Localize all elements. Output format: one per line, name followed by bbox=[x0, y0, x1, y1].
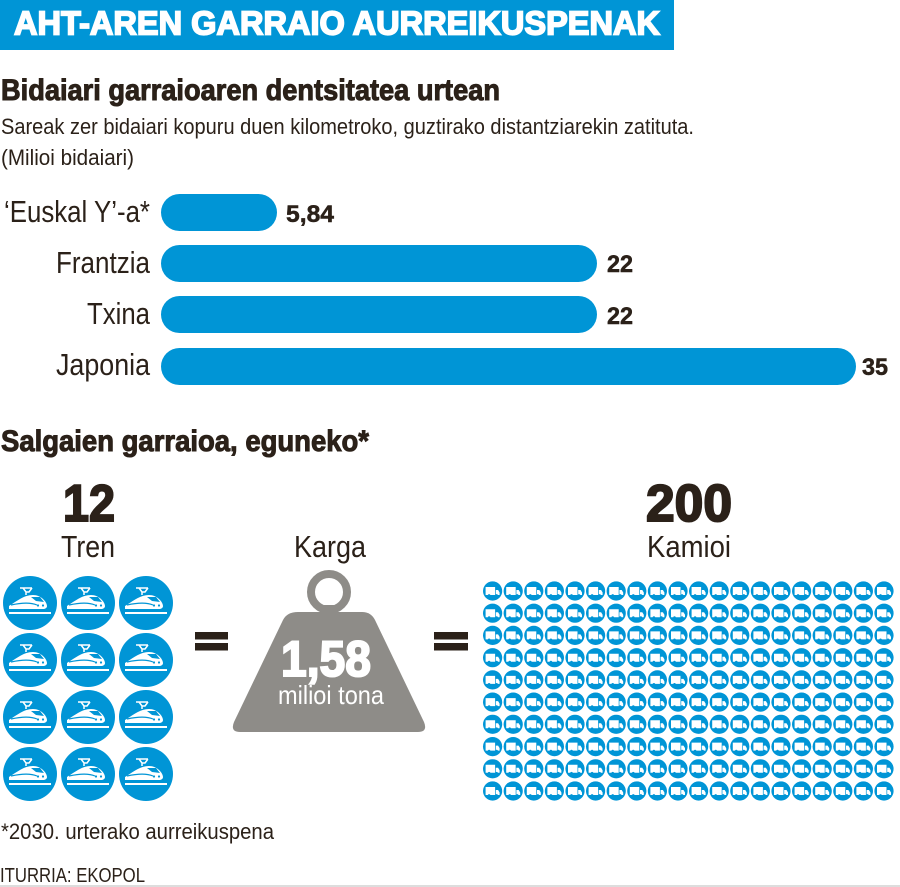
label: Karga: Karga bbox=[294, 529, 367, 564]
icons: 12 trains bbox=[3, 576, 173, 801]
equals sign right bbox=[434, 632, 468, 650]
bar: Japonia: Japonia bbox=[56, 347, 151, 382]
heading: passenger density: Bidaiari garraioaren dentsitatea urtean bbox=[1, 74, 500, 107]
number: 12 trains: Tren bbox=[61, 529, 115, 564]
number: 12 trains: 12 bbox=[63, 475, 115, 533]
bar: Frantzia bbox=[56, 245, 633, 282]
icon: weight bbox=[233, 574, 425, 732]
bar chart: passenger density bbox=[4, 194, 888, 385]
bar: Frantzia: 22 bbox=[607, 251, 633, 278]
weight unit: milioi tona bbox=[278, 680, 384, 710]
number: 200 trucks bbox=[646, 475, 732, 564]
source: ITURRIA: EKOPOL bbox=[0, 865, 145, 887]
bar: Frantzia: Frantzia bbox=[56, 245, 151, 280]
footnote: *2030. urterako aurreikuspena bbox=[1, 819, 275, 844]
number: 12 trains bbox=[61, 475, 115, 564]
number: 200 trucks: 200 bbox=[646, 475, 732, 533]
bar: Euskal Y: ‘Euskal Y’-a* bbox=[4, 194, 150, 229]
bar: Txina: Txina bbox=[87, 296, 151, 331]
heading: freight: Salgaien garraioa, eguneko* bbox=[1, 425, 369, 458]
description text: (Milioi bidaiari) bbox=[1, 145, 134, 170]
description text: Sareak zer bidaiari kopuru duen kilometroko, guztirako distantziarekin zatituta. bbox=[1, 114, 694, 139]
weight value: 1,58 bbox=[281, 631, 371, 687]
icons: 200 trucks bbox=[483, 581, 894, 801]
bar: Euskal Y: 5,84 bbox=[286, 201, 335, 228]
bar: Txina bbox=[87, 296, 633, 333]
bar: Euskal Y bbox=[4, 194, 335, 231]
bar: Txina: 22 bbox=[607, 303, 633, 330]
title banner: AHT-AREN GARRAIO AURREIKUSPENAK bbox=[14, 4, 660, 42]
description text bbox=[1, 114, 694, 170]
bar: Japonia: 35 bbox=[862, 354, 888, 381]
equals sign left bbox=[195, 632, 228, 650]
bar: Japonia bbox=[56, 347, 888, 385]
number: 200 trucks: Kamioi bbox=[647, 529, 731, 564]
